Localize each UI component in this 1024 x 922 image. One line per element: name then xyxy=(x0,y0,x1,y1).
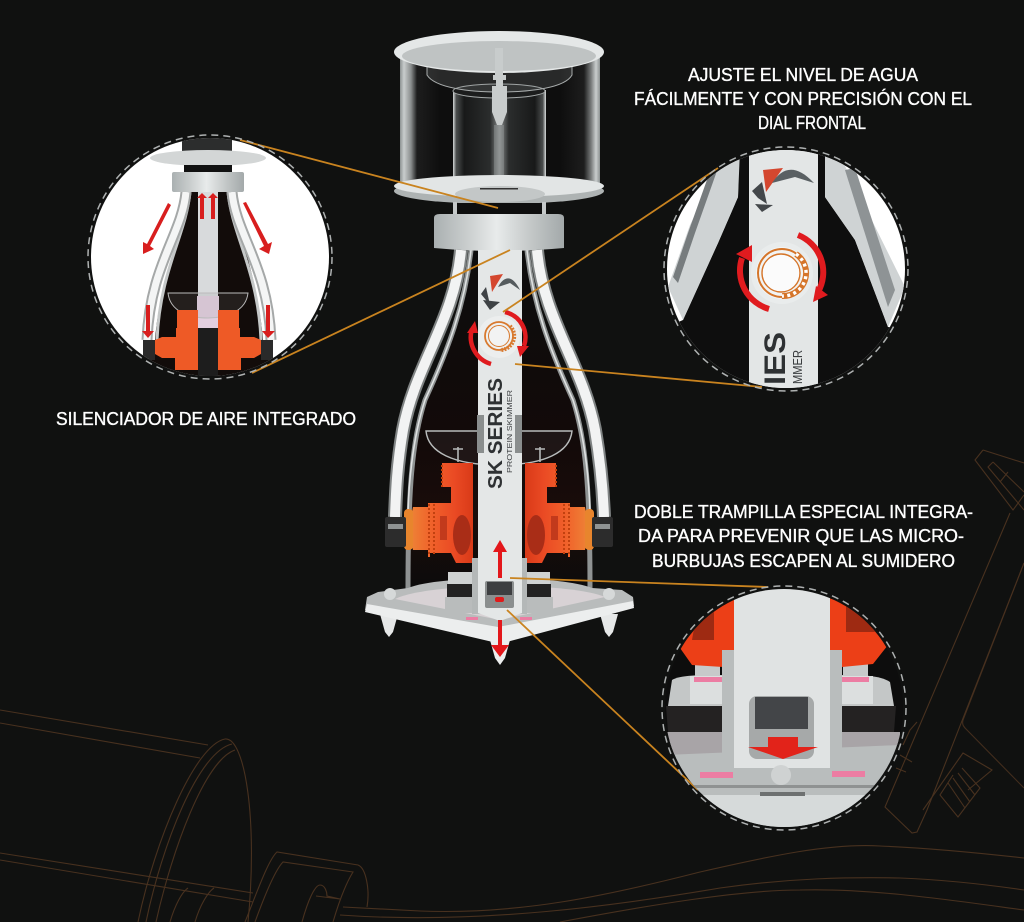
caption: trap xyxy=(634,502,973,571)
orange pump left xyxy=(680,598,734,667)
lower plates xyxy=(669,740,899,827)
logo xyxy=(752,168,814,212)
dial arrows xyxy=(471,312,525,364)
rotated brand fragment: MMER xyxy=(790,350,805,384)
brand text: PROTEIN SKIMMER xyxy=(505,389,514,473)
front column xyxy=(472,250,527,621)
dial arrowheads xyxy=(467,321,529,357)
left tubes and glass xyxy=(395,250,471,590)
tubes xyxy=(668,150,740,320)
centre stem xyxy=(492,48,507,125)
caption: dial: DIAL FRONTAL xyxy=(758,113,866,133)
caption: dial: FÁCILMENTE Y CON PRECISIÓN CON EL xyxy=(634,88,972,109)
red flow arrows xyxy=(142,193,275,338)
bottom plate xyxy=(394,178,604,204)
dark side panels xyxy=(679,156,749,382)
side strips xyxy=(722,650,735,754)
top plate xyxy=(394,31,604,73)
caption: trap: BURBUJAS ESCAPEN AL SUMIDERO xyxy=(652,551,955,571)
rotated brand fragment: IES xyxy=(759,332,792,385)
detail circle: front dial xyxy=(660,147,915,393)
rotated brand fragment xyxy=(764,333,802,384)
bell body xyxy=(407,250,592,590)
dark bell xyxy=(149,192,270,376)
detail circle: double trap xyxy=(660,585,910,835)
base plate with legs xyxy=(365,572,634,665)
connector lines xyxy=(240,140,768,790)
outlet window xyxy=(485,581,514,608)
collar xyxy=(434,214,564,251)
pump left xyxy=(155,310,198,370)
bolt xyxy=(771,765,791,785)
upper plates xyxy=(668,675,722,706)
caption: silencer: SILENCIADOR DE AIRE INTEGRADO xyxy=(56,409,356,429)
left pump xyxy=(385,447,545,563)
right pump xyxy=(525,463,613,563)
pink-topped cylinders xyxy=(690,676,723,704)
rotation arrowheads xyxy=(736,245,828,302)
flow arrows xyxy=(491,540,509,657)
product: SK Series protein skimmer xyxy=(365,31,634,665)
caption: dial: AJUSTE EL NIVEL DE AGUA xyxy=(688,65,918,85)
black rings xyxy=(666,706,722,732)
reaction cup xyxy=(394,31,604,204)
caption: trap: DA PARA PREVENIR QUE LAS MICRO- xyxy=(638,526,964,546)
pump right xyxy=(218,310,261,370)
right tubes and glass xyxy=(527,250,604,590)
column xyxy=(734,585,830,768)
logo xyxy=(481,274,520,310)
background line art: pipes and wrench xyxy=(0,450,1024,922)
brand text: SK SERIES xyxy=(485,378,507,489)
tubes xyxy=(147,192,271,340)
caption: trap: DOBLE TRAMPILLA ESPECIAL INTEGRA- xyxy=(634,502,973,522)
caption: dial xyxy=(634,65,972,133)
rotation arrows xyxy=(740,235,823,309)
foam bowl xyxy=(426,431,572,465)
red arrow xyxy=(748,737,818,759)
column xyxy=(749,148,818,393)
orange pump right xyxy=(829,598,888,667)
knob xyxy=(751,242,813,304)
neck xyxy=(453,202,546,214)
window xyxy=(749,696,814,759)
inner riser tube xyxy=(453,90,546,180)
detail circle: air silencer xyxy=(88,135,332,379)
water level dial xyxy=(471,312,525,364)
